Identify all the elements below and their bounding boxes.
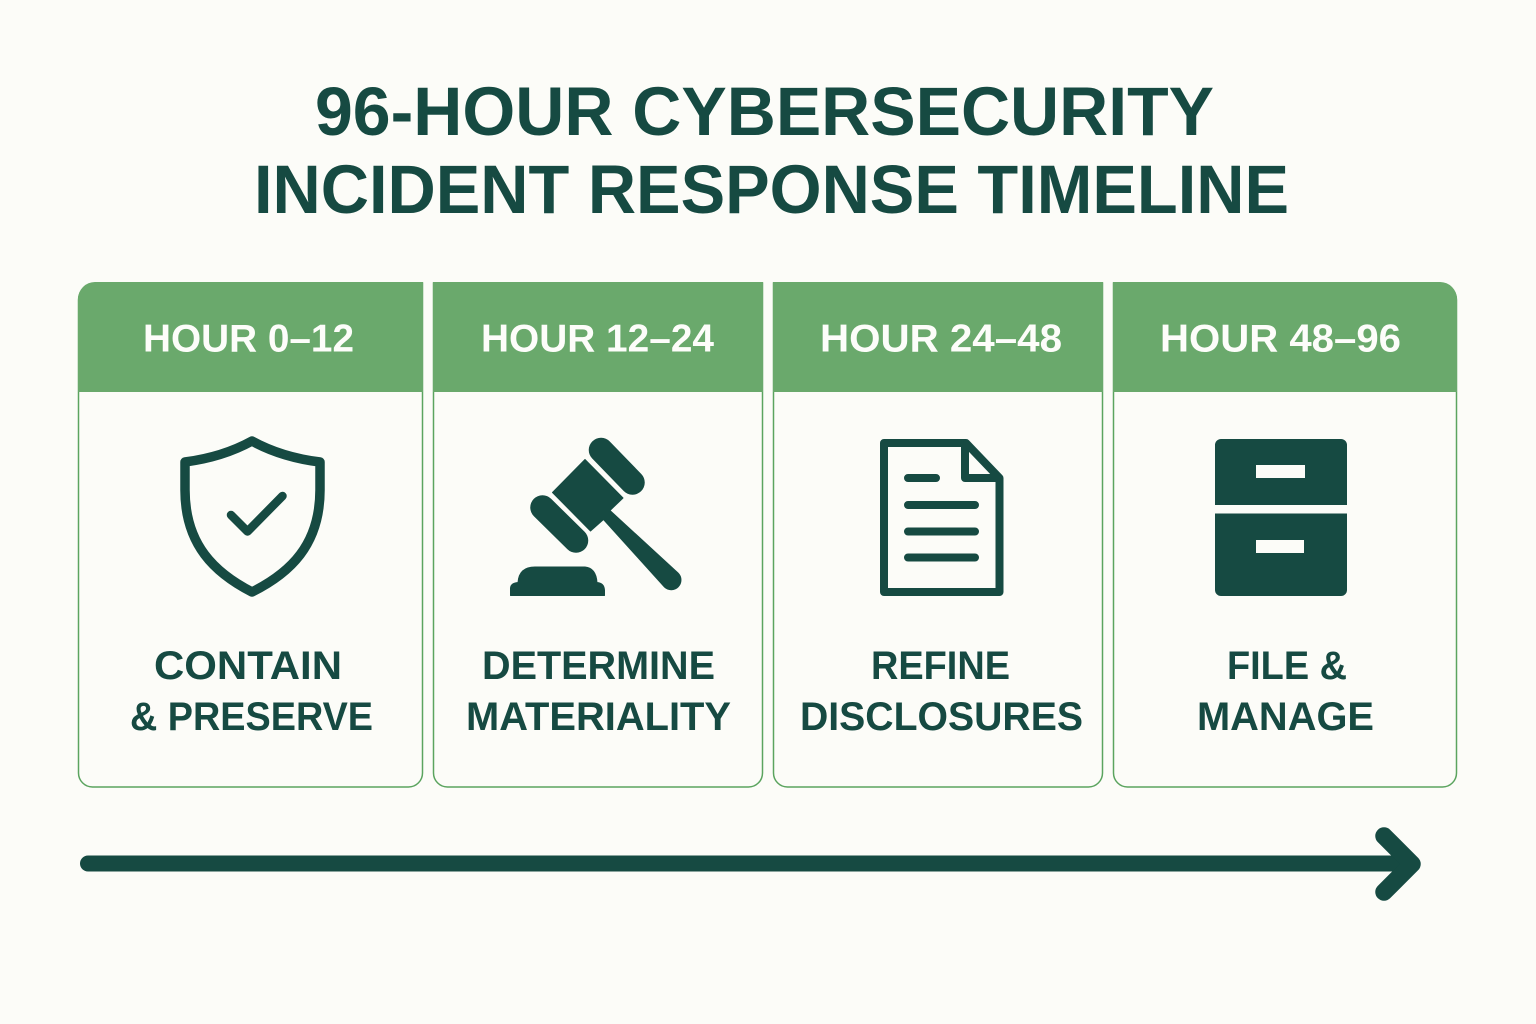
card label: & PRESERVE: [130, 695, 373, 739]
header label: HOUR 24–48: [820, 318, 1062, 360]
card label: [800, 644, 1083, 739]
card label: FILE &: [1227, 644, 1347, 688]
header label: HOUR 0–12: [143, 318, 354, 360]
header band: [78, 282, 423, 392]
header band: [433, 282, 763, 392]
card outline: [78, 283, 422, 787]
title: INCIDENT RESPONSE TIMELINE: [254, 151, 1289, 228]
panel: hour 24-48: [773, 282, 1103, 787]
card outline: [774, 283, 1102, 787]
card label: DETERMINE: [482, 644, 715, 688]
header band: [773, 282, 1103, 392]
card label: MANAGE: [1197, 695, 1374, 739]
card outline: [1114, 283, 1456, 787]
arrow: timeline direction: [88, 836, 1412, 892]
header label: HOUR 12–24: [481, 318, 714, 360]
icon: document: [884, 443, 1000, 592]
card label: [466, 644, 731, 739]
title: 96-HOUR CYBERSECURITY: [315, 73, 1214, 150]
icon: gavel: [510, 450, 681, 596]
panel: hour 48-96: [1113, 282, 1457, 787]
header band: [1113, 282, 1457, 392]
panel: hour 12-24: [433, 282, 763, 787]
title: [254, 73, 1289, 228]
card label: REFINE: [871, 644, 1010, 688]
header label: HOUR 48–96: [1160, 318, 1401, 360]
card label: CONTAIN: [154, 644, 342, 688]
card label: DISCLOSURES: [800, 695, 1083, 739]
panel: hour 0-12: [78, 282, 423, 787]
card label: MATERIALITY: [466, 695, 731, 739]
icon: filing cabinet: [1215, 439, 1347, 596]
card outline: [434, 283, 762, 787]
card label: [1197, 644, 1374, 739]
card label: [130, 644, 373, 739]
icon: shield with check: [185, 441, 320, 592]
